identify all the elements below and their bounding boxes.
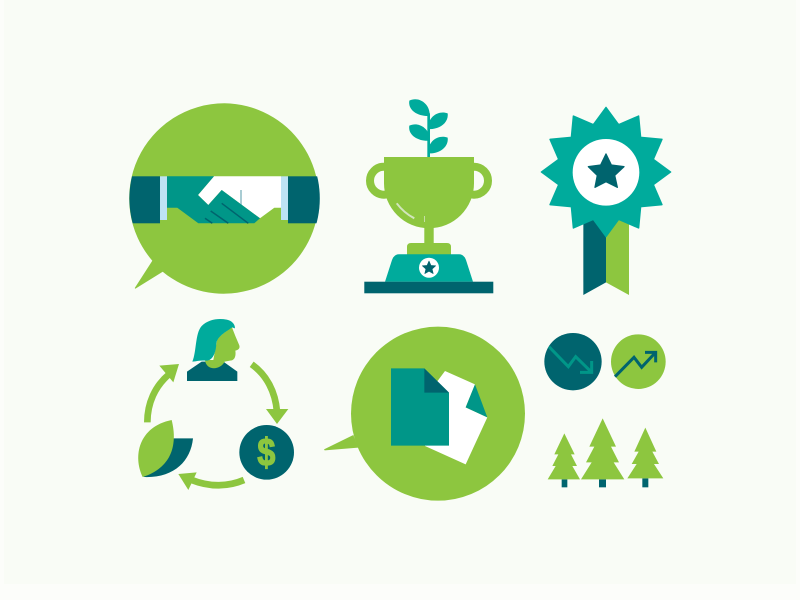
icon: handshake speech bubble <box>129 103 321 294</box>
icon: rosette award <box>541 107 671 295</box>
trunks <box>562 479 567 487</box>
burst <box>541 107 671 237</box>
bubble <box>351 327 525 501</box>
bubble <box>129 103 319 294</box>
leaf <box>143 438 193 477</box>
rising chart <box>611 334 666 389</box>
handshake <box>129 176 321 223</box>
tree right <box>627 428 663 478</box>
hair <box>192 319 235 362</box>
star <box>588 154 624 187</box>
white paper <box>425 371 487 464</box>
icon: cycle of person, money and leaf: $ <box>257 430 275 474</box>
badge star <box>419 258 439 278</box>
icon: document speech bubble <box>324 327 525 501</box>
ribbon <box>583 217 606 295</box>
face <box>205 327 240 368</box>
dollar coin <box>239 425 294 480</box>
cup <box>384 157 474 228</box>
plant <box>409 99 448 158</box>
icon: cycle of person, money and leaf <box>138 319 294 490</box>
icon: trophy with plant <box>364 99 493 293</box>
falling chart <box>544 333 602 390</box>
tree middle <box>581 418 624 479</box>
icon: three pine trees <box>548 418 663 487</box>
handles <box>370 167 398 195</box>
teal document <box>391 368 449 446</box>
icon: falling and rising charts <box>544 333 666 390</box>
tree left <box>548 433 580 479</box>
shoulders <box>187 362 237 381</box>
stem <box>424 226 434 246</box>
pedestal <box>385 254 473 282</box>
arrows <box>252 364 277 412</box>
